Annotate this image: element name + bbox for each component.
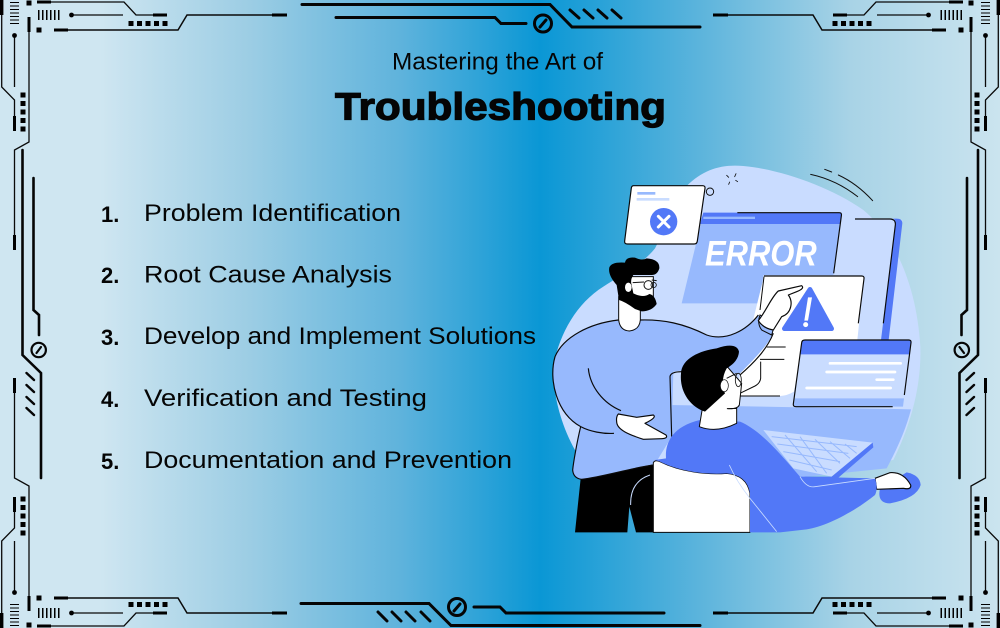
seated man [655,346,921,532]
error panel [682,213,842,303]
item 3: Develop and Implement Solutions [144,323,536,350]
background blob [554,166,920,493]
item 4: 4. [101,387,119,412]
sweater [553,315,773,479]
ear [720,380,728,392]
neck and face [699,366,742,429]
glasses [633,280,657,283]
hair [681,346,739,412]
side window [793,340,911,407]
heading: Troubleshooting [335,86,666,128]
item 3: 3. [101,325,119,350]
ear [625,283,632,292]
desk [670,405,911,480]
circuit border: top-right corner [713,0,1000,250]
hand on mouse [875,473,911,489]
chair [653,461,750,532]
mouse pad [879,472,921,503]
close icon [650,208,677,235]
item 5: 5. [101,449,119,474]
decorative marks [706,169,873,201]
hair and beard [609,258,659,311]
glasses [727,373,737,378]
item 4: Verification and Testing [144,385,427,412]
keyboard [763,430,873,482]
standing man [553,258,803,532]
warning window [737,276,864,396]
item 1: 1. [101,202,119,227]
monitor body [840,218,902,340]
open hand [617,414,667,439]
sweater [655,420,877,532]
circuit border: bottom centre [301,598,700,626]
item 2: Root Cause Analysis [144,262,392,289]
circuit border: top centre [302,4,700,32]
circuit border: top-left corner [0,0,287,250]
circuit border: right side [955,150,978,478]
item 1: Problem Identification [144,200,401,227]
pants [575,464,655,532]
neck [619,277,653,331]
cuff [759,315,775,335]
error label: ERROR [705,234,817,273]
item 2: 2. [101,263,119,288]
circuit border: bottom-left corner [0,378,287,628]
error popup window [625,186,705,244]
title [335,48,666,128]
pointing hand [758,286,803,330]
illustration: troubleshooting an error [553,166,921,532]
subtitle: Mastering the Art of [392,48,603,76]
numbered list [101,200,536,474]
circuit border: bottom-right corner [713,378,1000,628]
item 5: Documentation and Prevention [144,447,512,474]
circuit border: left side [22,150,46,478]
warning icon [784,289,832,329]
